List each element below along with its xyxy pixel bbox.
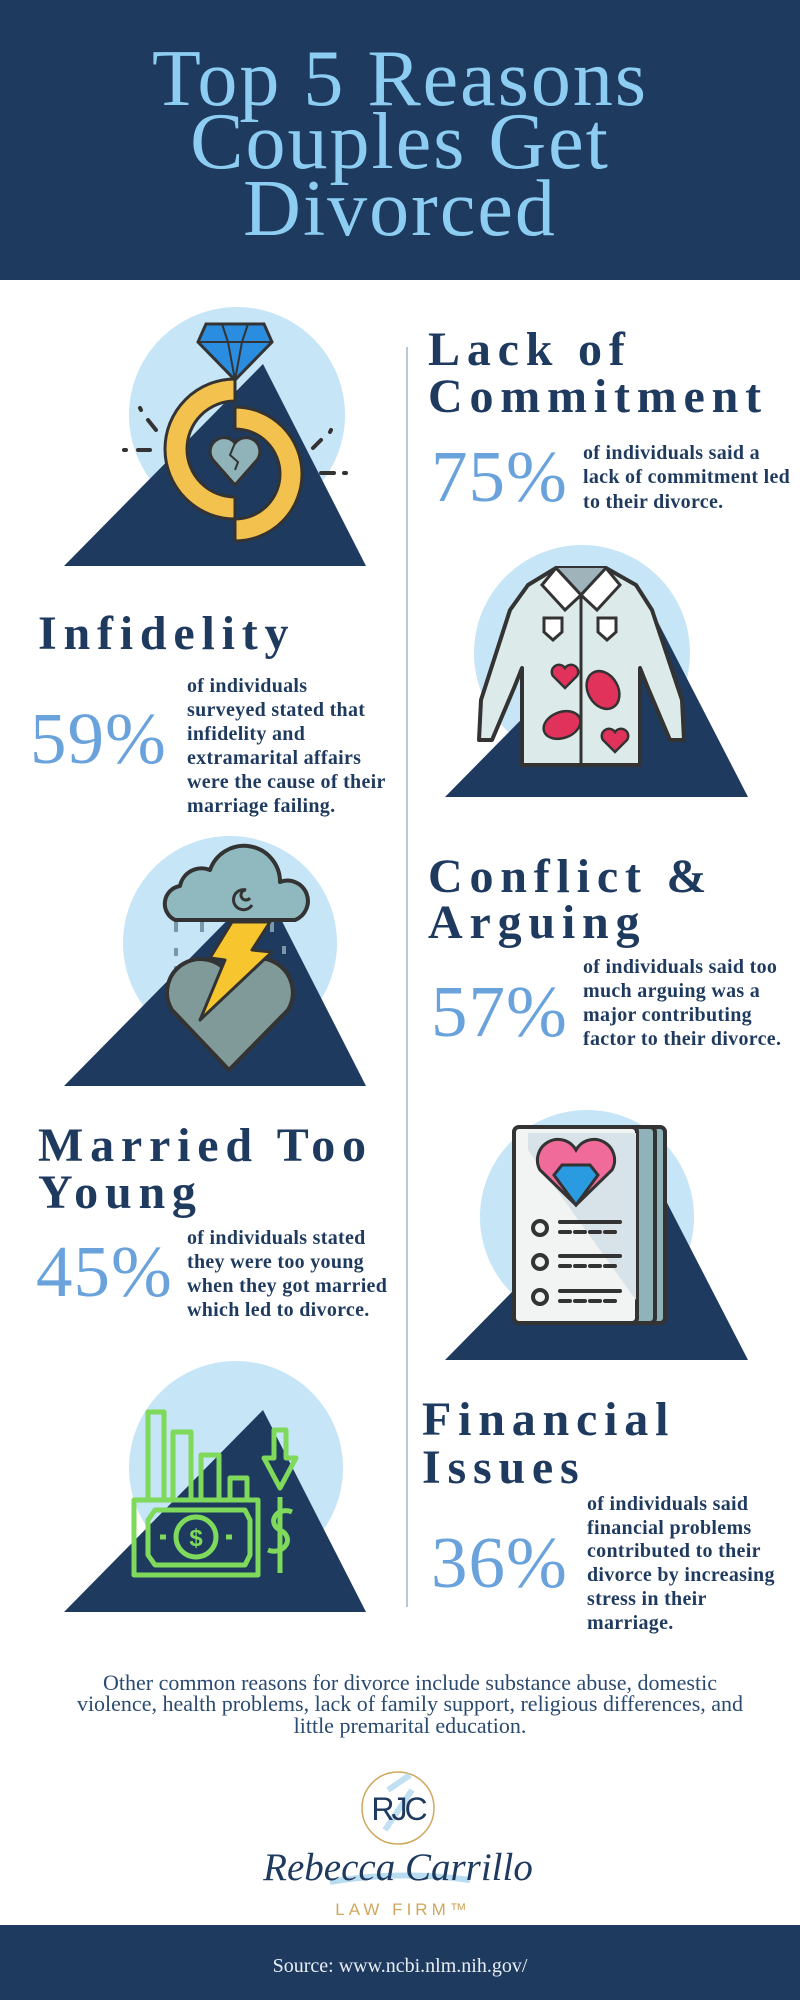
- text: infidelity description: surveyed stated that: [187, 699, 365, 721]
- text: infidelity description: infidelity and: [187, 723, 305, 745]
- heading: Married Too Young: Married Too: [38, 1119, 373, 1172]
- text: commitment description: of individuals said a: [583, 442, 760, 464]
- panel: storm icon: [64, 836, 366, 1086]
- text: infidelity description: of individuals: [187, 675, 307, 697]
- heading: Lack of Commitment: Lack of: [428, 323, 632, 376]
- text: commitment description: lack of commitment led: [583, 466, 790, 488]
- stat: 57%: 57%: [431, 971, 568, 1052]
- source text: Source: www.ncbi.nlm.nih.gov/: [273, 1955, 528, 1977]
- panel: checklist icon: [445, 1110, 748, 1360]
- text: other reasons: violence, health problems, lack of family support, religious differences, and: [77, 1691, 743, 1716]
- logo: Rebecca Carrillo: [262, 1846, 533, 1889]
- heading: Conflict & Arguing: Arguing: [428, 896, 646, 949]
- text: commitment description: [583, 442, 790, 513]
- heading: Financial Issues: Financial: [422, 1393, 675, 1446]
- text: other reasons: [77, 1670, 743, 1738]
- panel: ring icon: [64, 307, 366, 566]
- heading: Infidelity: Infidelity: [38, 607, 295, 660]
- text: infidelity description: [187, 675, 386, 817]
- stat: 45%: 45%: [36, 1231, 173, 1312]
- title: Couples Get: [190, 98, 610, 186]
- heading: Married Too Young: [38, 1119, 373, 1219]
- heading: Financial Issues: Issues: [422, 1441, 586, 1494]
- text: married young description: which led to divorce.: [187, 1299, 370, 1321]
- title: Divorced: [243, 165, 557, 253]
- text: financial description: financial problems: [587, 1517, 752, 1539]
- text: financial description: stress in their: [587, 1588, 707, 1610]
- text: commitment description: to their divorce.: [583, 491, 723, 513]
- text: married young description: [187, 1227, 387, 1321]
- heading: Lack of Commitment: [428, 323, 768, 423]
- stat: 36%: 36%: [431, 1522, 568, 1603]
- panel: money icon: $: [189, 1525, 203, 1552]
- heading: Financial Issues: [422, 1393, 675, 1494]
- title: [152, 35, 648, 253]
- text: financial description: contributed to their: [587, 1540, 761, 1562]
- heading: Conflict & Arguing: Conflict &: [428, 850, 713, 903]
- text: conflict description: factor to their divorce.: [583, 1028, 781, 1050]
- text: infidelity description: extramarital affairs: [187, 747, 361, 769]
- text: married young description: they were too young: [187, 1251, 364, 1273]
- text: infidelity description: were the cause of their: [187, 771, 386, 793]
- heading: Lack of Commitment: Commitment: [428, 370, 768, 423]
- text: financial description: divorce by increasing: [587, 1564, 775, 1586]
- text: financial description: [587, 1493, 775, 1634]
- logo: LAW FIRM™: [335, 1900, 471, 1919]
- heading: Married Too Young: Young: [38, 1166, 203, 1219]
- panel: coat icon: [445, 545, 748, 797]
- panel: money icon: [64, 1361, 366, 1612]
- text: conflict description: of individuals said too: [583, 956, 777, 978]
- text: conflict description: much arguing was a: [583, 980, 760, 1002]
- text: financial description: marriage.: [587, 1612, 674, 1634]
- title: Top 5 Reasons: [152, 35, 648, 123]
- logo: RJC: [371, 1791, 426, 1827]
- stat: 75%: 75%: [431, 436, 568, 517]
- heading: Conflict & Arguing: [428, 850, 713, 949]
- text: married young description: when they got married: [187, 1275, 387, 1297]
- text: other reasons: little premarital education.: [294, 1713, 526, 1738]
- text: conflict description: major contributing: [583, 1004, 752, 1026]
- text: married young description: of individuals stated: [187, 1227, 366, 1249]
- logo: [262, 1772, 533, 1919]
- header banner: [0, 0, 800, 280]
- text: conflict description: [583, 956, 781, 1050]
- stat: 59%: 59%: [30, 698, 167, 779]
- text: infidelity description: marriage failing.: [187, 795, 335, 817]
- text: other reasons: Other common reasons for divorce include substance abuse, domestic: [103, 1670, 717, 1695]
- text: financial description: of individuals said: [587, 1493, 748, 1515]
- footer: [0, 1925, 800, 2000]
